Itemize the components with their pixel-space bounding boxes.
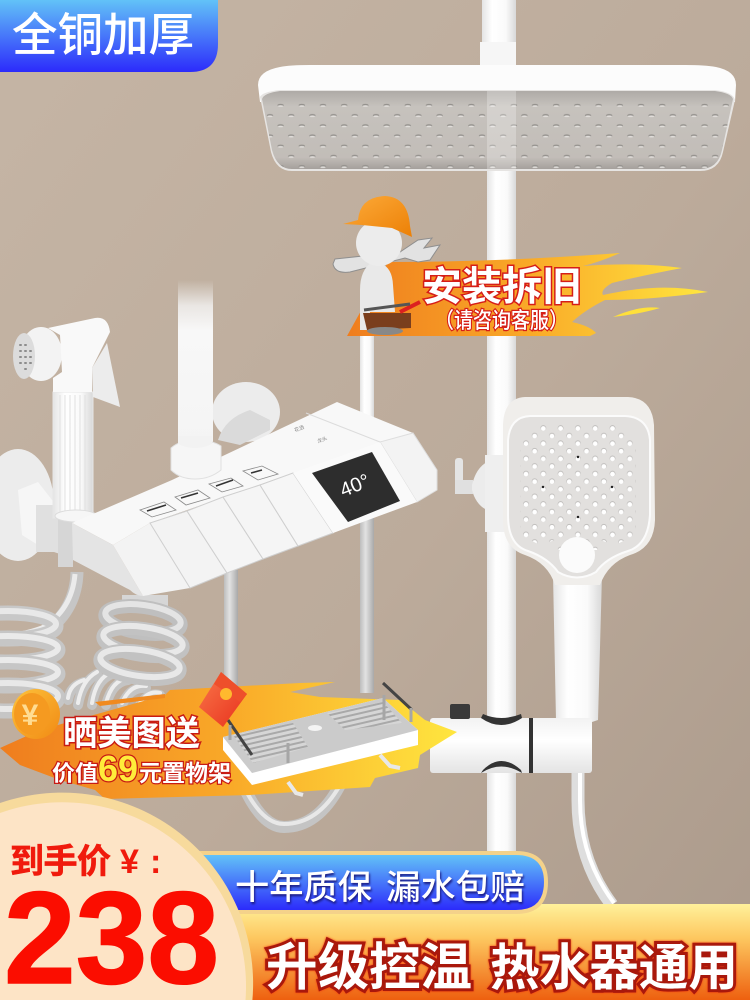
install banner flame [347,253,708,336]
shelf [223,683,418,795]
icon: hard hat [343,196,412,237]
right spiral hose [99,595,184,683]
warranty pill: 漏水包赔 [386,869,525,907]
icon: coin: ¥ [22,699,39,732]
panel: small labels [293,424,328,445]
price label [10,843,161,881]
top left badge: 全铜加厚 [12,9,194,61]
worker figure [333,196,440,335]
orange slogan band: 升级控温 [266,939,472,996]
spray dots [542,456,613,518]
display screen: 40° [337,470,373,502]
panel: left body [72,523,143,596]
lower hose loop [243,785,340,827]
upper pipe and collar [171,280,221,479]
thin hose behind panel [224,330,374,695]
hand sprayer [13,318,120,567]
icon: toolbox [363,313,411,330]
gift banner text: 价值 [52,761,98,786]
warranty pill [180,851,548,914]
top left badge [0,0,218,72]
panel: small labels: 龙头 [316,435,328,445]
rain shower head [258,65,736,171]
orange slogan band: 热水器通用 [490,940,738,996]
warranty pill: 十年质保 [235,869,372,907]
panel: front corner [113,523,190,596]
price circle [0,793,253,1000]
panel: right edge [380,433,437,502]
price label: 到手价 [10,843,111,881]
gift banner flame [0,682,457,799]
gift banner text: 69 [98,748,138,789]
panel: mode icons [140,466,278,517]
icon: body [360,262,395,330]
panel: small labels: 花洒 [293,424,305,434]
gift banner text: 晒美图送 [63,715,200,753]
panel: front buttons [150,473,333,588]
install banner text: （请咨询客服） [435,308,568,333]
outer head [503,397,655,585]
install banner text [422,265,582,333]
icon: red envelope [199,672,247,727]
install banner text: 安装拆旧 [422,265,582,309]
left spiral hose [0,572,77,711]
hand shower [503,397,655,724]
gift banner text [52,715,231,789]
icon: coin [12,689,60,739]
display screen [312,452,400,522]
price label: : [150,843,161,881]
hand sprayer wall mount [0,449,72,561]
control panel [72,402,437,596]
middle spiral hose [68,672,160,705]
icon: wrench [333,238,440,272]
inner face [508,416,650,578]
gift banner text: 元置物架 [139,760,231,786]
panel: top surface [72,402,437,545]
mode button [559,537,595,573]
orange slogan band [200,904,750,1000]
right wall mount [212,382,280,445]
hand shower bracket [455,455,505,532]
price label: ¥ [120,843,139,881]
main riser pipe [480,0,516,858]
slide bracket [430,704,614,905]
handle [553,575,602,724]
